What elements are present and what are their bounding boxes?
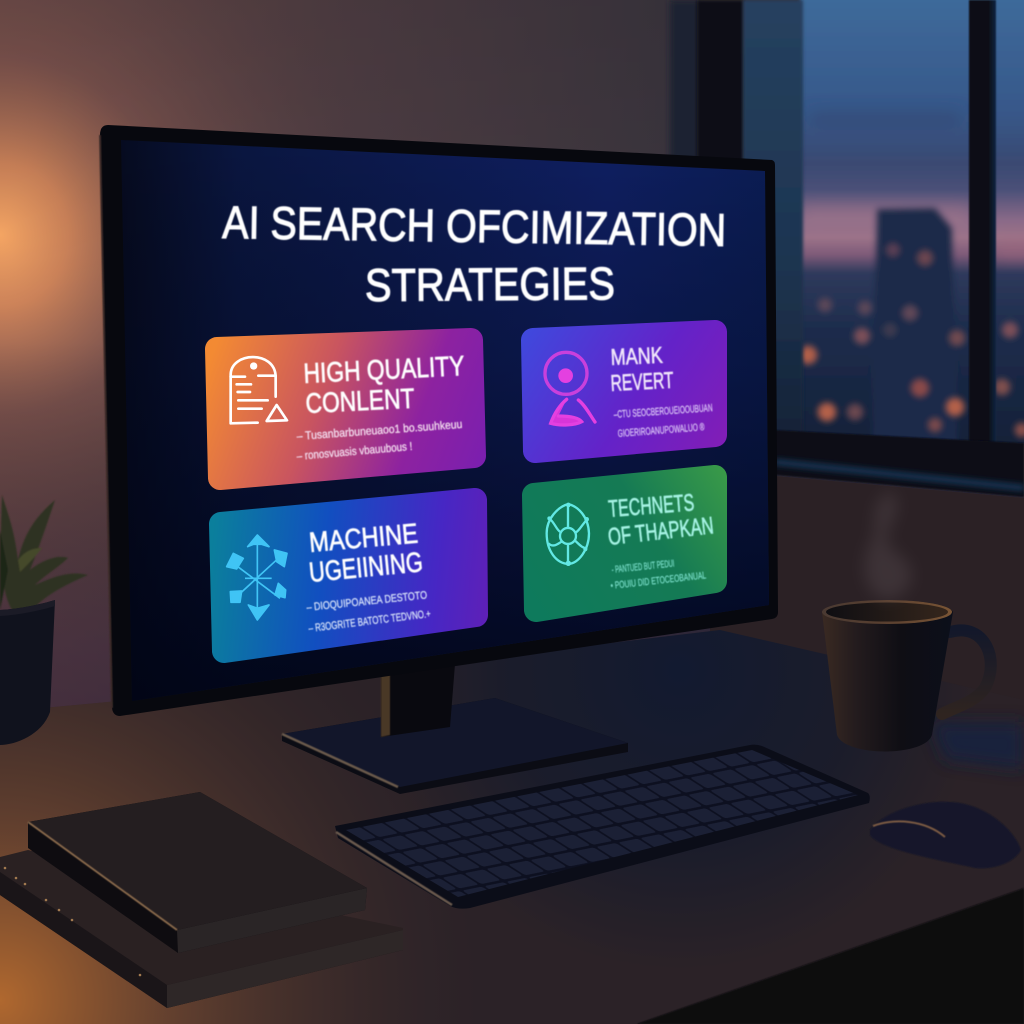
distant building	[872, 208, 958, 445]
mug body	[822, 600, 953, 752]
heading: technets of thapkan: OF THAPKAN	[607, 512, 715, 551]
cloud streaks	[800, 112, 1024, 258]
bullet text: - PANTUED BUT PEDUI	[611, 558, 675, 576]
heading: technets of thapkan: TECHNETS	[607, 489, 695, 523]
heading: high quality content: HIGH QUALITY	[303, 350, 465, 389]
plant pot	[0, 600, 55, 745]
heading: machine ugeiining: UGEIINING	[308, 546, 424, 588]
monitor stand	[282, 664, 628, 794]
bullet text: –CTU SEOCBEROUEIOOUBUAN	[613, 402, 713, 421]
heading: technets of thapkan	[607, 489, 715, 551]
bullet text	[610, 558, 707, 592]
title	[222, 196, 727, 311]
title: AI SEARCH OFCIMIZATION	[222, 196, 727, 256]
desk surface	[0, 630, 1024, 1024]
blue cup shadow on desk	[930, 722, 1024, 770]
heading: machine ugeiining: MACHINE	[308, 518, 419, 558]
panel: machine ugeiining	[221, 500, 476, 651]
steam	[864, 490, 912, 600]
bullet text	[613, 402, 713, 440]
keyboard	[335, 745, 870, 909]
icon: webcam person	[545, 352, 595, 425]
panel: mank revert	[533, 332, 715, 451]
bullet text: – R3OGRITE BATOTC TEDVNO.+	[308, 608, 431, 635]
wall below the window	[710, 476, 1024, 710]
monitor screen	[121, 140, 769, 701]
wall background	[0, 0, 1024, 760]
title: STRATEGIES	[365, 257, 615, 311]
bullet text: GIOERIROANUPOWALUO ®	[617, 421, 705, 440]
bullet text: – Tusanbarbuneuaoo1 bo.suuhkeuu	[296, 419, 463, 443]
binding dots	[4, 867, 141, 976]
bullet text: • POUIU DID ETOCEOBANUAL	[610, 570, 707, 592]
heading: mank revert: REVERT	[610, 367, 674, 396]
icon: snowflake arrows	[227, 535, 287, 620]
mouse	[870, 802, 1021, 868]
upper book	[28, 792, 367, 953]
notebooks	[0, 792, 403, 1008]
window frame	[670, 0, 1024, 710]
heading: high quality content: CONLENT	[305, 383, 415, 419]
bullet text	[306, 589, 431, 635]
monitor bezel	[100, 125, 778, 716]
heading: mank revert	[610, 342, 674, 396]
window sill	[775, 430, 1024, 497]
city bokeh lights	[799, 243, 1024, 437]
plant	[0, 495, 88, 612]
mug rim	[822, 600, 952, 624]
icon: network wheel	[547, 503, 589, 566]
stand neck	[381, 664, 455, 737]
monitor	[100, 125, 778, 716]
desk front edge	[637, 888, 1024, 1024]
panel: high quality content	[217, 340, 474, 478]
heading: machine ugeiining	[308, 518, 424, 588]
lower book	[0, 850, 403, 1008]
stand base	[282, 698, 628, 794]
coffee mug	[822, 600, 991, 752]
bullet text: – ronosvuasis vbauubous !	[296, 441, 413, 463]
bullet text: – DIOQUIPOANEA DESTOTO	[306, 589, 428, 614]
window with dusk city view	[799, 0, 1024, 445]
heading: high quality content	[303, 350, 465, 419]
bullet text	[296, 419, 463, 463]
icon: document with cone	[231, 357, 287, 423]
heading: mank revert: MANK	[610, 342, 664, 370]
mug handle	[942, 630, 991, 714]
panel: technets of thapkan	[534, 477, 715, 610]
